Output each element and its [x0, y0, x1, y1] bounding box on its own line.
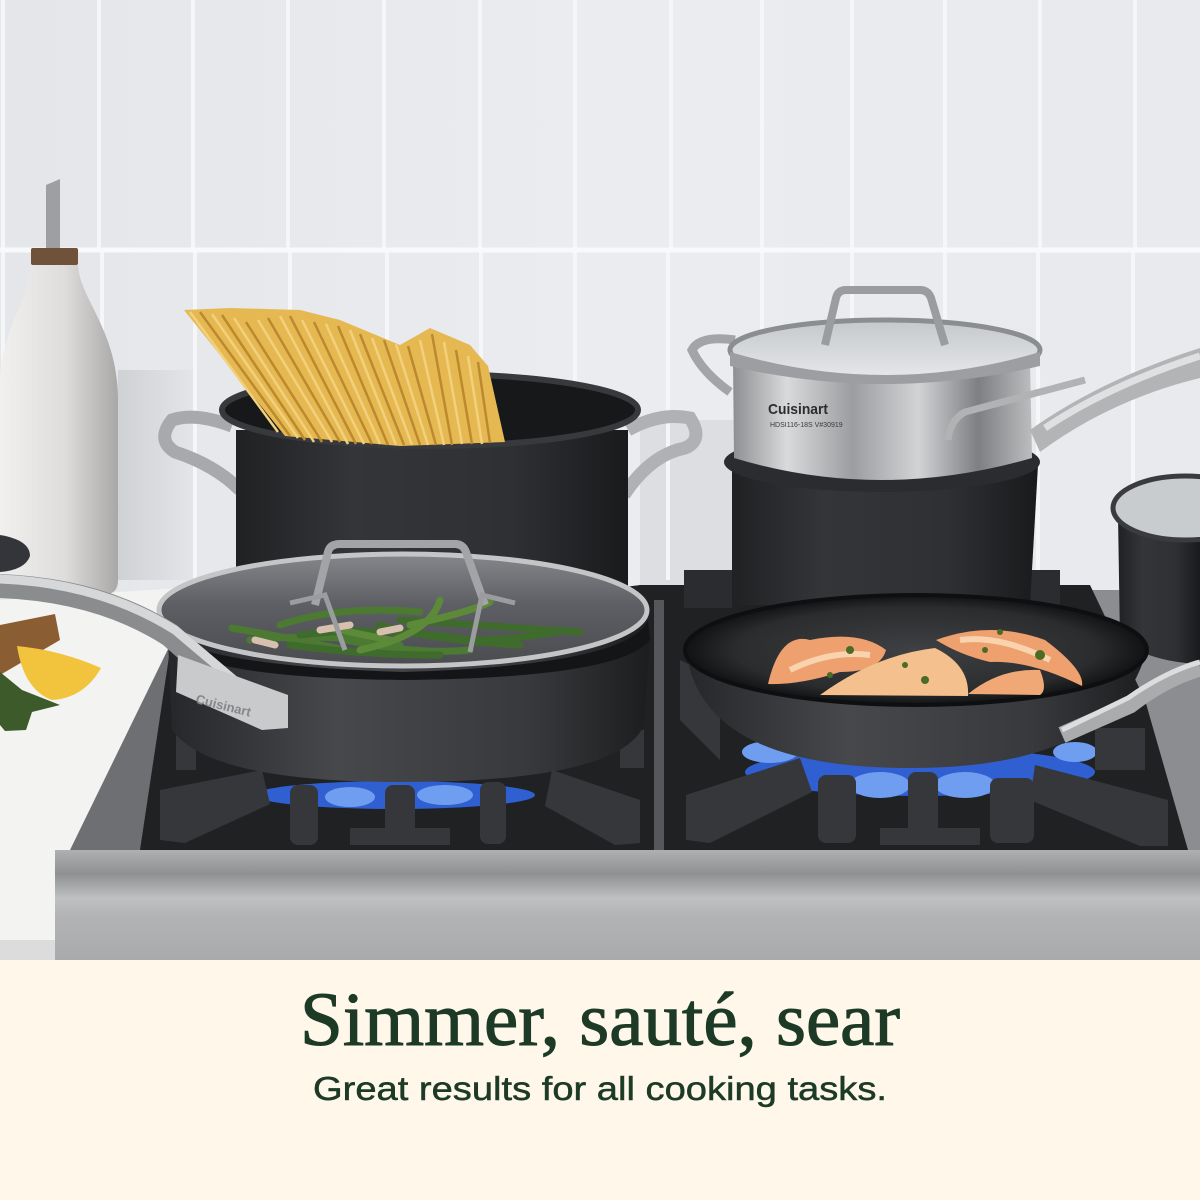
shrimp [768, 630, 1082, 696]
saute pan with glass lid and green beans [0, 544, 650, 782]
tiled wall background [0, 0, 1200, 600]
long pan handle [1030, 348, 1200, 452]
brand mark: Cuisinart [768, 401, 828, 418]
insert handle left [692, 339, 735, 392]
pot body [236, 430, 628, 590]
steel insert [733, 360, 1032, 480]
steamer insert and saucepan: HDSI116-18S V#30919 [770, 422, 843, 429]
small saucepan at right edge [1113, 476, 1200, 664]
countertop and stove [0, 585, 1200, 960]
icon: olive oil bottle [0, 179, 118, 594]
long handle and bracket [0, 586, 238, 695]
glass lid [730, 320, 1040, 380]
skillet handle [1062, 668, 1200, 735]
saute pan with glass lid and green beans: Cuisinart [194, 691, 253, 720]
burner flames and grates [160, 660, 1168, 846]
pan body [168, 640, 650, 782]
skillet base [686, 645, 1148, 768]
pot handles [165, 416, 696, 495]
pasta [184, 308, 505, 446]
skillet interior [685, 595, 1147, 705]
skillet with shrimp [685, 595, 1200, 768]
rear burner grates [684, 570, 1060, 608]
title: Simmer, sauté, sear [300, 978, 900, 1062]
stockpot with pasta [165, 308, 696, 590]
lid handle [825, 290, 945, 345]
lower saucepan [732, 465, 1038, 605]
icon: cutting board, lemon and herbs [0, 535, 101, 731]
caption band [0, 960, 1200, 1200]
glass lid [159, 554, 647, 666]
green beans [232, 600, 580, 655]
subtitle: Great results for all cooking tasks. [313, 1070, 887, 1107]
lid handle [315, 544, 485, 605]
steamer insert and saucepan [692, 290, 1200, 605]
